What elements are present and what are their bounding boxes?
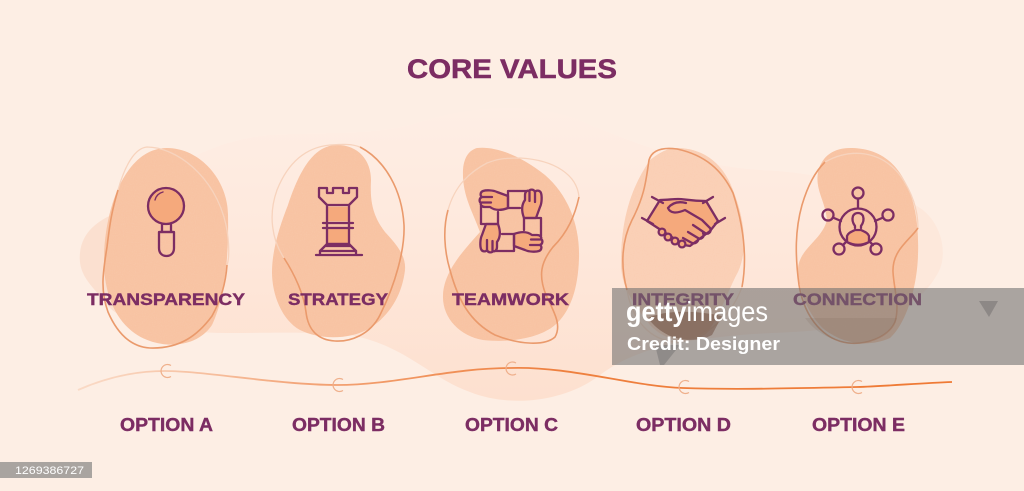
watermark band [612, 288, 1024, 365]
icon: four hands [480, 190, 542, 252]
left wash lobe [80, 212, 130, 320]
label: integrity: INTEGRITY [632, 290, 735, 309]
blob [443, 148, 579, 341]
label: transparency: TRANSPARENCY [87, 290, 246, 309]
label: teamwork: TEAMWORK [452, 290, 570, 309]
tag number: 1269386727 [15, 465, 84, 477]
panel: teamwork [443, 148, 579, 343]
faint outline [627, 287, 742, 342]
tag box [0, 462, 92, 478]
label: connection: CONNECTION [793, 290, 922, 309]
icon: chess rook [316, 188, 362, 255]
background wash blob [105, 108, 942, 401]
hand 4 [480, 206, 500, 252]
outline [103, 190, 227, 348]
outline [445, 197, 579, 343]
hand 3 [496, 232, 542, 252]
band shadow shapes [648, 312, 722, 340]
outline [284, 147, 404, 341]
option labels [120, 415, 905, 435]
credit: Credit: Designer [627, 334, 780, 354]
panel: connection [793, 148, 943, 343]
faint outline [448, 158, 579, 210]
band [612, 288, 1024, 365]
timeline line [78, 368, 952, 390]
option d: OPTION D [636, 415, 731, 435]
hand 1 [480, 190, 526, 210]
blob [621, 148, 744, 340]
connection blob shadow [805, 318, 897, 343]
panel: transparency [87, 147, 246, 348]
timeline markers [161, 362, 862, 394]
outline [796, 162, 918, 343]
triangle mark [979, 301, 998, 317]
label: strategy: STRATEGY [288, 290, 389, 309]
faint outline [272, 144, 360, 258]
getty logo: gettyimages [626, 296, 768, 327]
faint outline [118, 147, 229, 265]
option a: OPTION A [120, 415, 213, 435]
blob [104, 148, 228, 345]
panel: strategy [272, 144, 405, 341]
option c: OPTION C [465, 415, 558, 435]
faint outline [825, 153, 918, 228]
image id tag [0, 462, 92, 478]
icon: network person [822, 188, 894, 254]
icon: magnifying glass [148, 188, 184, 256]
option e: OPTION E [812, 415, 905, 435]
title: CORE VALUES [407, 54, 617, 84]
blob [798, 148, 918, 343]
icon: handshake [642, 197, 725, 247]
right wash [912, 205, 943, 292]
panel: integrity [621, 148, 745, 342]
timeline [78, 362, 952, 394]
hand 2 [522, 190, 542, 236]
outline [623, 148, 745, 290]
blob [272, 145, 405, 337]
option b: OPTION B [292, 415, 385, 435]
